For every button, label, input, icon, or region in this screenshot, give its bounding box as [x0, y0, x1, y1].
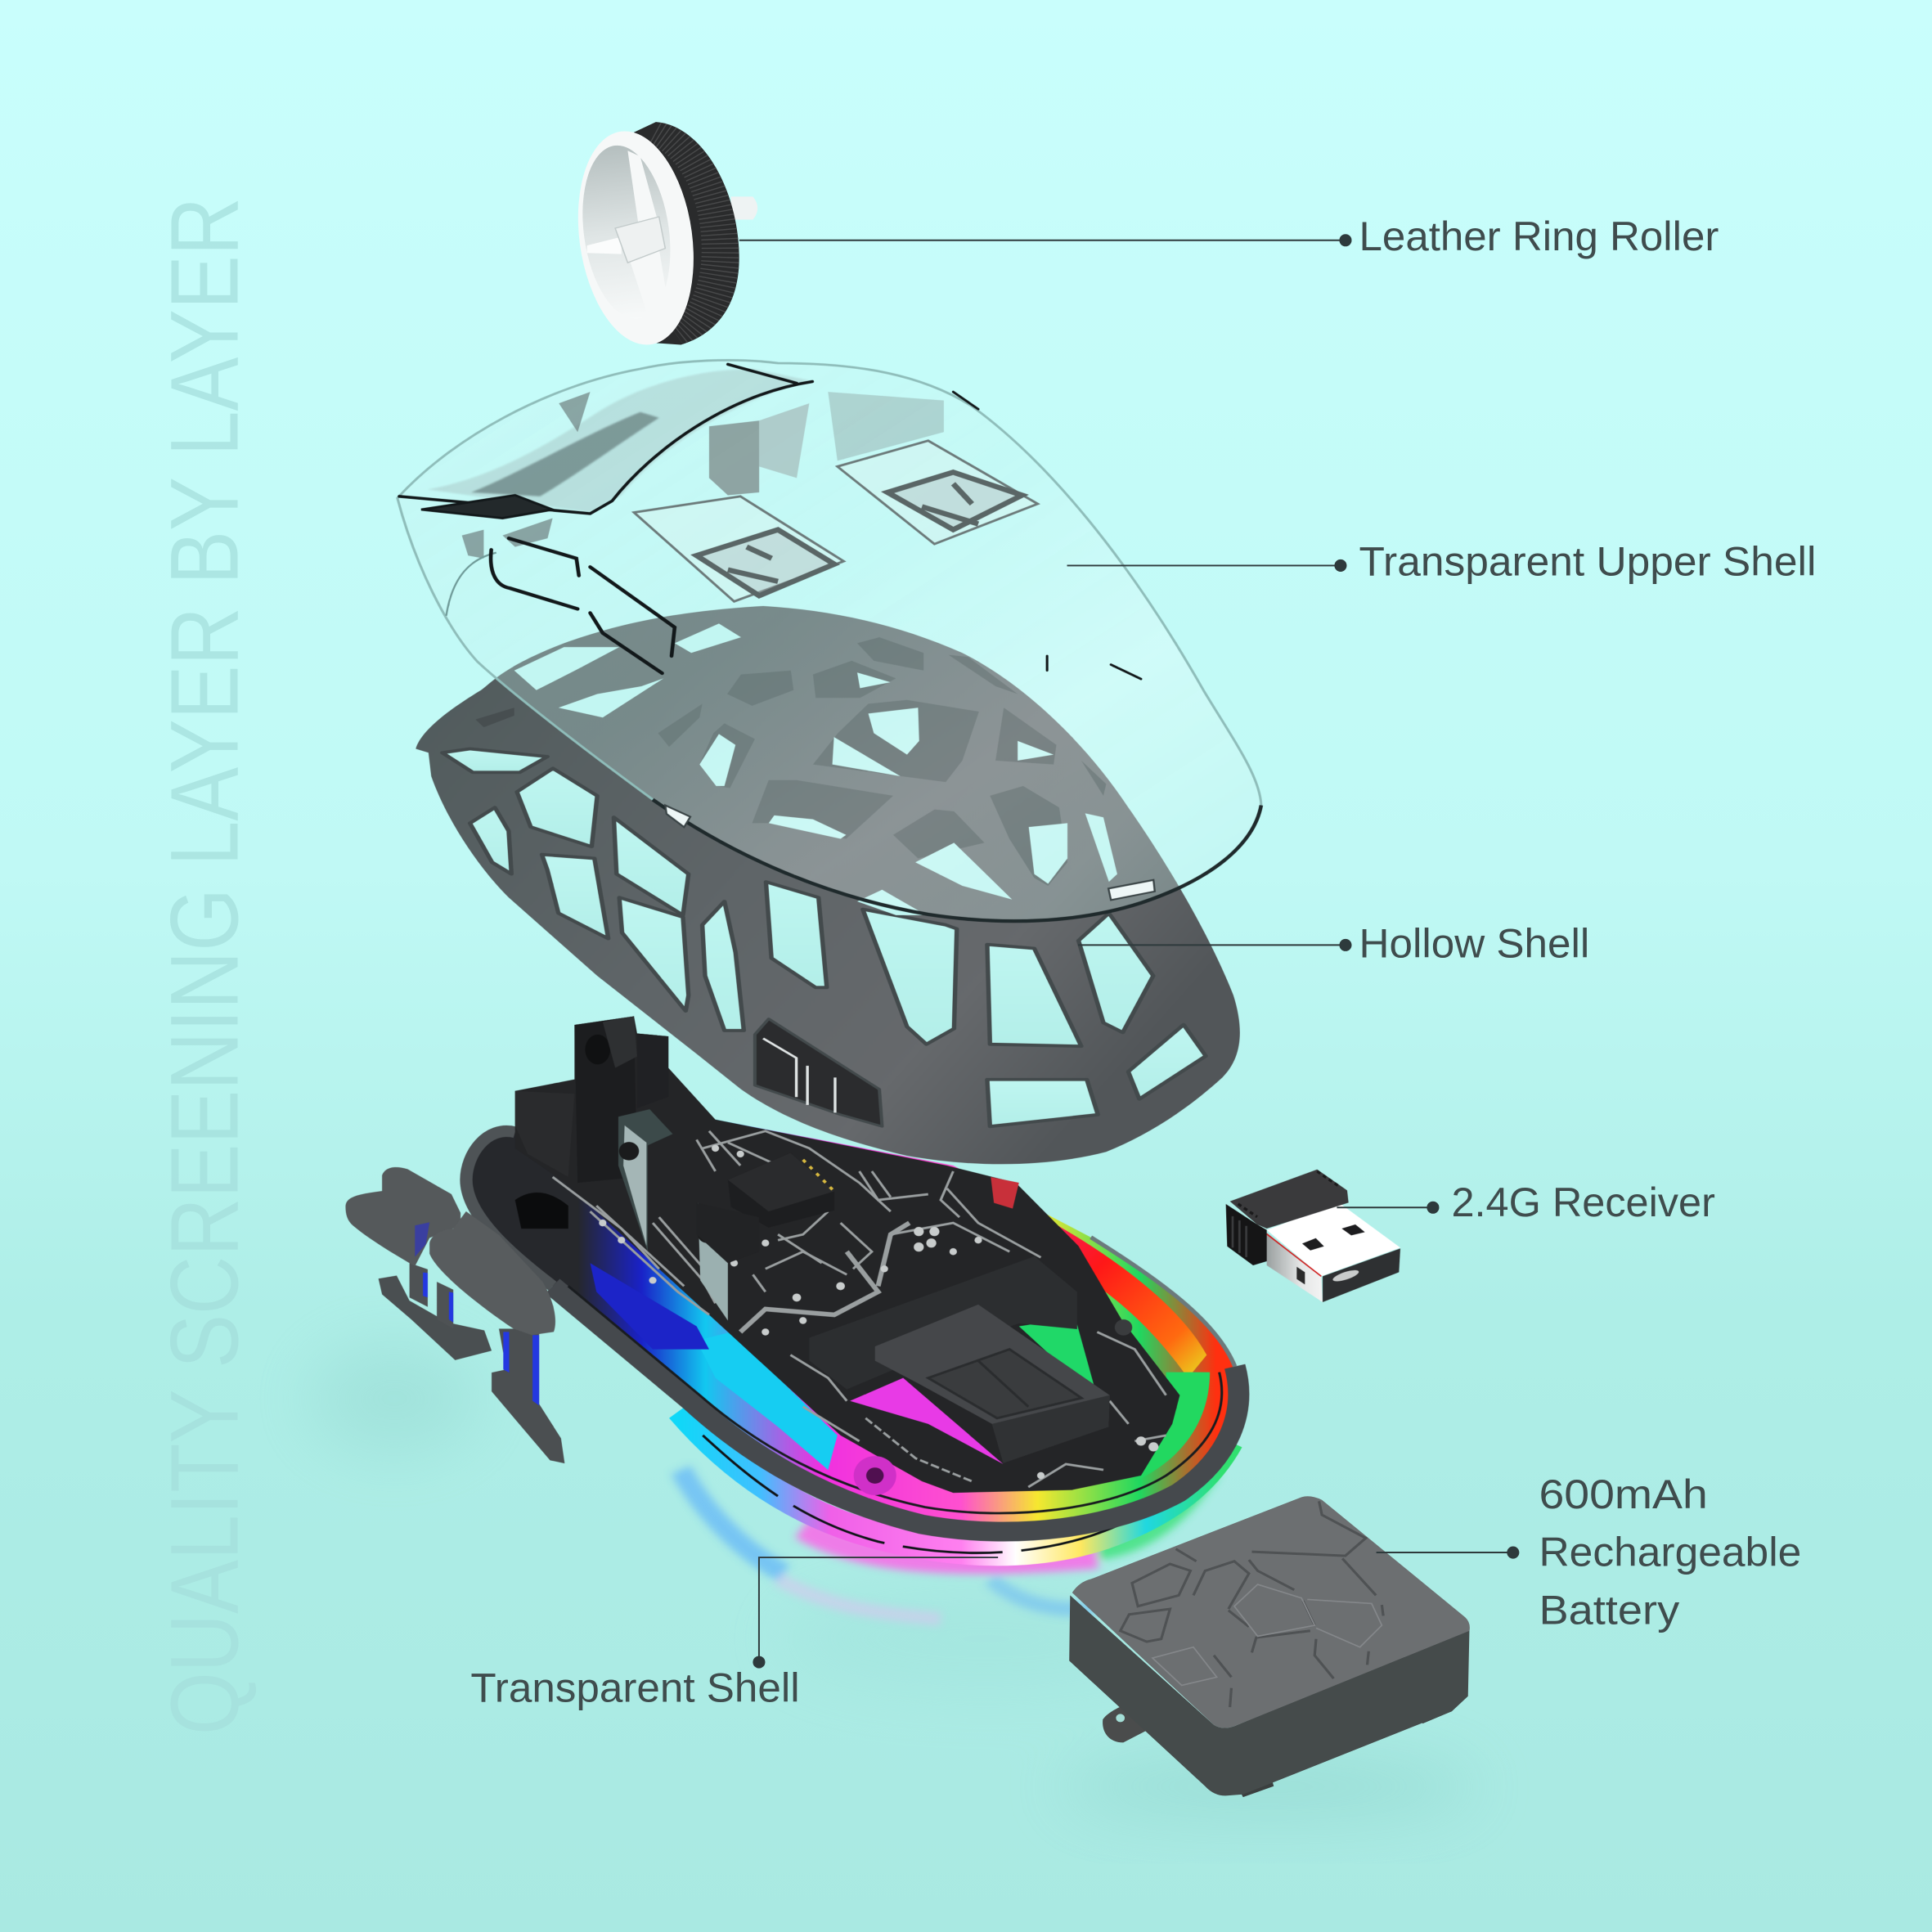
rgb glow under base	[681, 1470, 1210, 1619]
inner switch plate left	[634, 403, 843, 601]
rails	[379, 1275, 492, 1360]
label: transparent upper shell: Transparent Upper Shell	[1359, 538, 1816, 584]
2.4G receiver	[1226, 1170, 1400, 1302]
soft shadows on the surface	[308, 1343, 1479, 1816]
circuit traces	[553, 1114, 1166, 1487]
leather ring roller	[566, 122, 757, 351]
inner front arc	[446, 553, 496, 616]
see-through top holes	[514, 623, 1117, 915]
solder dots	[599, 1145, 1158, 1479]
top ridge smear	[428, 369, 809, 513]
leader line: leather ring roller	[739, 234, 1351, 246]
leader line: battery	[1377, 1547, 1519, 1559]
leader line: hollow shell	[1078, 939, 1351, 951]
hex relief	[1121, 1501, 1383, 1707]
see-through side holes	[443, 748, 1206, 1126]
label: hollow shell: Hollow Shell	[1359, 920, 1589, 966]
side buttons	[345, 1167, 564, 1463]
tray floor	[466, 1120, 1238, 1532]
label: receiver: 2.4G Receiver	[1452, 1179, 1715, 1225]
circuit board	[515, 1016, 1179, 1493]
pcb seen through shell	[755, 1019, 882, 1126]
transparent upper shell	[398, 360, 1261, 921]
transparent base with RGB light and PCB	[466, 1016, 1238, 1619]
red light segment	[1016, 1203, 1206, 1378]
dark recesses under glass	[475, 637, 1106, 886]
dark seam lines	[399, 364, 1141, 679]
hollow shell	[416, 606, 1240, 1164]
leader line: transparent shell	[753, 1557, 998, 1669]
leader line: receiver	[1337, 1202, 1439, 1214]
clips	[665, 806, 1155, 900]
button one	[345, 1167, 461, 1266]
rim light	[681, 1409, 1229, 1552]
deep blue light segment	[590, 1263, 709, 1350]
leader line: transparent upper shell	[1067, 559, 1346, 572]
inner switch plate right	[828, 392, 1038, 544]
switches and chip	[515, 1016, 1132, 1495]
label: transparent shell: Transparent Shell	[470, 1665, 800, 1710]
tray ring rear curve	[466, 1131, 553, 1286]
button two	[429, 1211, 555, 1335]
600mAh battery	[1069, 1496, 1470, 1797]
battery bay	[809, 1256, 1110, 1464]
green light segment	[1134, 1373, 1210, 1481]
dark ridge streak	[471, 412, 659, 496]
label: battery	[1539, 1471, 1801, 1633]
label: battery: Battery	[1539, 1587, 1679, 1633]
glass bottom edge	[653, 799, 1261, 921]
label: battery: 600mAh	[1539, 1471, 1708, 1517]
nose details	[462, 392, 590, 559]
label: leather ring roller: Leather Ring Roller	[1359, 213, 1719, 259]
label: battery: Rechargeable	[1539, 1530, 1801, 1575]
tray ring	[553, 1286, 1238, 1532]
cyan light segment	[697, 1332, 838, 1470]
